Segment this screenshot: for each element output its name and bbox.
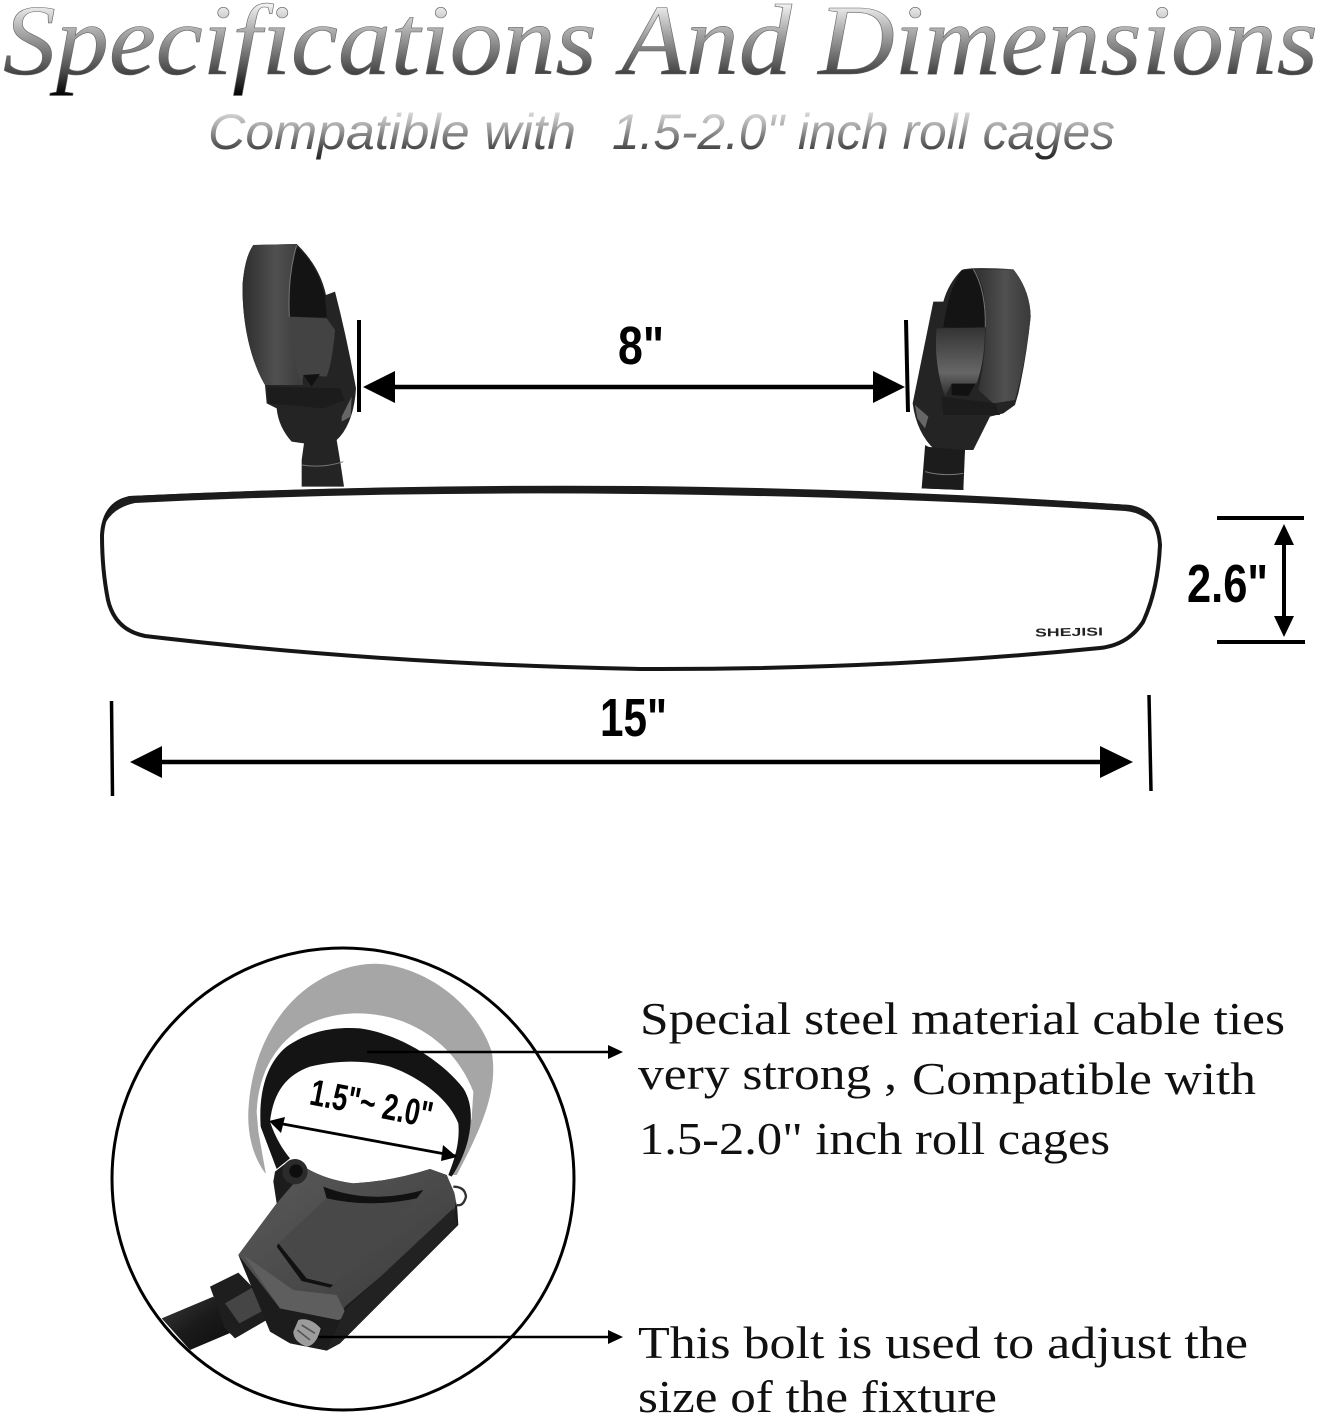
callout text: cable ties xyxy=(638,993,1285,1164)
callout text: cable ties: very strong , xyxy=(638,1048,897,1099)
rear view mirror frame xyxy=(102,488,1160,669)
subtitle: 1.5-2.0" inch roll cages xyxy=(612,104,1115,160)
dimension: 15 inch length: 15" xyxy=(600,688,667,748)
icon: clamp body detail xyxy=(162,964,493,1351)
dimension: 15 inch length xyxy=(112,688,1151,796)
arrow: cable tie callout xyxy=(367,1045,623,1059)
dimension: 8 inch width xyxy=(359,316,908,412)
arrow: bolt callout xyxy=(318,1330,623,1344)
brand logo: SHEJISI xyxy=(1035,626,1103,640)
clamp diameter label: 1.5"~ 2.0" xyxy=(307,1072,436,1136)
dimension: 8 inch width: 8" xyxy=(618,316,664,376)
dimension: 2.6 inch height: 2.6" xyxy=(1187,554,1268,614)
left mirror clamp xyxy=(243,244,356,487)
callout text: bolt: This bolt is used to adjust the xyxy=(638,1317,1248,1368)
mirror top rim xyxy=(106,486,1158,528)
callout text: bolt xyxy=(638,1317,1248,1417)
subtitle: Compatible with xyxy=(208,104,576,160)
callout text: cable ties: Special steel material cable ties xyxy=(640,993,1285,1044)
close-up circle outline xyxy=(112,948,574,1410)
callout text: cable ties: Compatible with xyxy=(912,1053,1256,1104)
callout text: cable ties: 1.5-2.0" inch roll cages xyxy=(639,1113,1110,1164)
detail circle: clamp close-up xyxy=(112,948,574,1410)
dimension: 2.6 inch height xyxy=(1187,518,1305,642)
clamp diameter arrow xyxy=(272,1122,456,1156)
subtitle xyxy=(208,104,1115,160)
right mirror clamp xyxy=(913,268,1031,490)
